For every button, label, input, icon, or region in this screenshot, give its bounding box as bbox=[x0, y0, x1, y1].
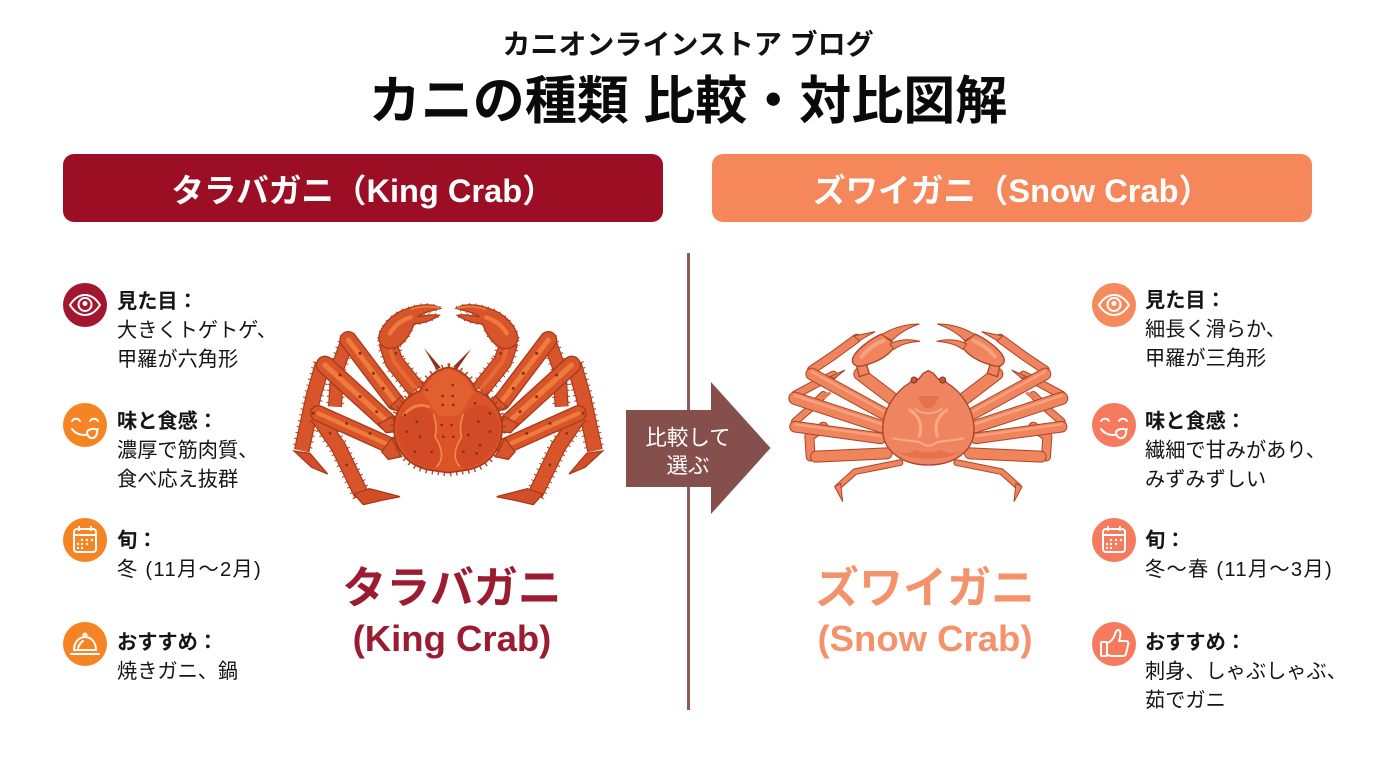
icon: eye bbox=[1092, 283, 1136, 327]
text: taste and texture bbox=[117, 410, 258, 490]
header: blog name: カニオンラインストア ブログ bbox=[502, 29, 874, 60]
text: taste and texture: 味と食感： bbox=[1145, 410, 1246, 432]
text: taste and texture: 食べ応え抜群 bbox=[117, 468, 238, 490]
text: appearance bbox=[117, 290, 277, 370]
text: recommended dishes: 茹でガニ bbox=[1145, 690, 1226, 712]
text: appearance: 細長く滑らか、 bbox=[1145, 318, 1286, 340]
big label: King Crab bbox=[342, 564, 562, 659]
icon: serving cloche bbox=[63, 622, 107, 666]
icon: calendar bbox=[63, 518, 107, 562]
text: appearance: 見た目： bbox=[117, 290, 198, 312]
panel heading: Snow Crab: ズワイガニ（Snow Crab） bbox=[813, 172, 1211, 209]
text: season: 冬 (11月～2月) bbox=[117, 558, 262, 580]
text: recommended dishes: 焼きガニ、鍋 bbox=[117, 660, 238, 682]
text: appearance bbox=[1145, 290, 1286, 370]
text: season: 旬： bbox=[117, 530, 157, 552]
illustration: King Crab bbox=[292, 303, 605, 506]
text: taste and texture bbox=[1145, 410, 1326, 490]
text: appearance: 甲羅が六角形 bbox=[117, 348, 238, 370]
text: taste and texture: 味と食感： bbox=[117, 410, 218, 432]
panel: Snow Crab attributes bbox=[1092, 283, 1347, 712]
big label: Snow Crab: ズワイガニ bbox=[815, 564, 1035, 613]
arrow: compare and choose bbox=[626, 382, 770, 514]
icon: calendar bbox=[1092, 518, 1136, 562]
text: season bbox=[117, 529, 262, 580]
big label: Snow Crab: (Snow Crab) bbox=[818, 618, 1032, 659]
text: recommended dishes: おすすめ： bbox=[117, 632, 218, 654]
big label: King Crab: タラバガニ bbox=[342, 564, 562, 613]
icon: thumbs up bbox=[1092, 622, 1136, 666]
illustration: Snow Crab bbox=[788, 324, 1068, 502]
panel: King Crab attributes bbox=[63, 283, 277, 682]
text: season: 冬～春 (11月～3月) bbox=[1145, 558, 1333, 580]
text: recommended dishes bbox=[117, 632, 238, 682]
title: カニの種類 比較・対比図解 bbox=[369, 73, 1007, 131]
big label: King Crab: (King Crab) bbox=[353, 618, 551, 659]
centre divider line bbox=[686, 253, 690, 710]
text: recommended dishes: 刺身、しゃぶしゃぶ、 bbox=[1145, 660, 1347, 682]
icon: tasty face bbox=[63, 403, 107, 447]
big label: Snow Crab bbox=[815, 564, 1035, 659]
text: season: 旬： bbox=[1145, 530, 1185, 552]
text: taste and texture: 繊細で甘みがあり、 bbox=[1145, 440, 1326, 462]
text: appearance: 大きくトゲトゲ、 bbox=[117, 320, 277, 342]
text: recommended dishes: おすすめ： bbox=[1145, 632, 1246, 654]
arrow: compare and choose: 選ぶ bbox=[666, 454, 710, 478]
arrow: compare and choose: 比較して bbox=[645, 426, 731, 450]
text: recommended dishes bbox=[1145, 632, 1347, 712]
text: season bbox=[1145, 529, 1333, 580]
panel heading: King Crab: タラバガニ（King Crab） bbox=[171, 172, 555, 209]
text: appearance: 見た目： bbox=[1145, 290, 1226, 312]
text: appearance: 甲羅が三角形 bbox=[1145, 348, 1266, 370]
text: taste and texture: 濃厚で筋肉質、 bbox=[117, 440, 258, 462]
panel heading: Snow Crab bbox=[712, 154, 1312, 222]
icon: tasty face bbox=[1092, 403, 1136, 447]
text: taste and texture: みずみずしい bbox=[1145, 468, 1266, 490]
icon: eye bbox=[63, 283, 107, 327]
panel heading: King Crab bbox=[63, 154, 663, 222]
